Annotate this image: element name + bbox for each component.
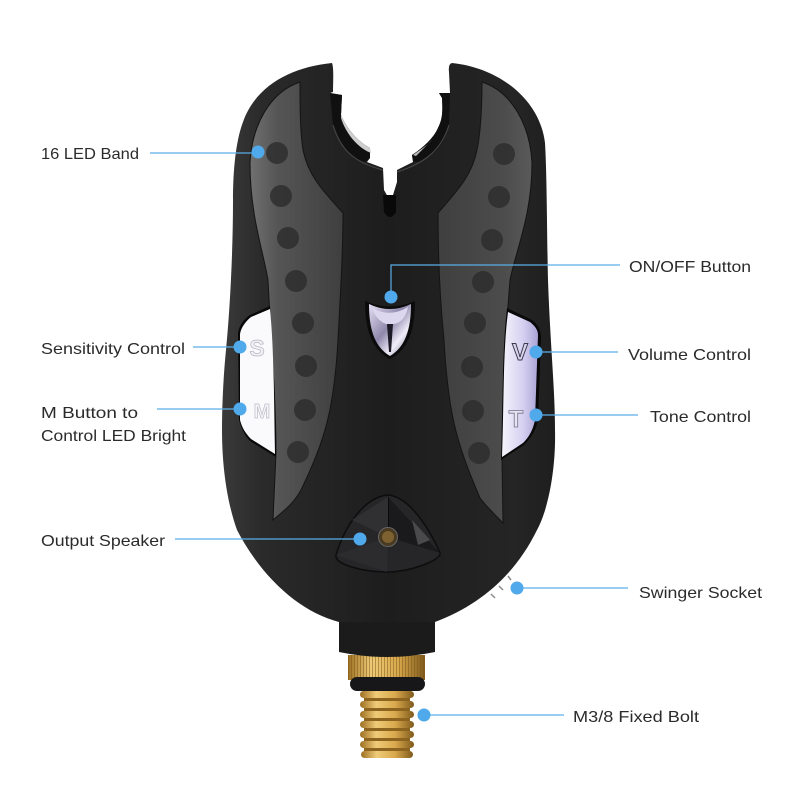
callout: 16 LED Band: 16 LED Band [41,146,139,163]
callout: Output Speaker: Output Speaker [41,533,166,550]
swinger socket pins [491,576,511,598]
power button [365,301,415,359]
callout: ON/OFF Button: ON/OFF Button [629,259,751,276]
callout: M Button: M Button to [41,405,138,422]
letter S: S [249,335,265,361]
callout: Volume Control: Volume Control [628,347,751,364]
jaw inner cavities [330,93,450,217]
callout: Swinger Socket [510,582,763,602]
callout: ON/OFF Button [384,259,751,304]
V and T buttons [501,308,541,460]
letter M: M [254,401,270,423]
S and M buttons [238,306,276,457]
letter T: T [509,406,524,433]
callout: Tone Control: Tone Control [650,409,751,426]
right LED panel [438,82,532,523]
callout: Output Speaker [41,532,366,550]
callout: Swinger Socket: Swinger Socket [639,585,763,602]
callout: 16 LED Band [41,146,264,163]
brass bolt [348,655,425,758]
body shell [222,63,555,622]
callout: M Button [41,402,246,445]
callout: M Button: Control LED Bright [41,428,187,445]
callout: Sensitivity Control [41,340,246,358]
alarm device [222,63,555,758]
left LED dots [266,142,317,463]
speaker neck [339,615,435,657]
callout: M3/8 Fixed Bolt [418,708,700,726]
callout: Sensitivity Control: Sensitivity Control [41,341,185,358]
callout: M3/8 Fixed Bolt: M3/8 Fixed Bolt [573,709,700,726]
callout: Tone Control [530,408,751,426]
letter V: V [512,339,528,366]
callout: Volume Control [530,346,751,364]
right LED dots [461,143,515,464]
speaker [336,495,440,572]
left LED panel [250,82,343,520]
